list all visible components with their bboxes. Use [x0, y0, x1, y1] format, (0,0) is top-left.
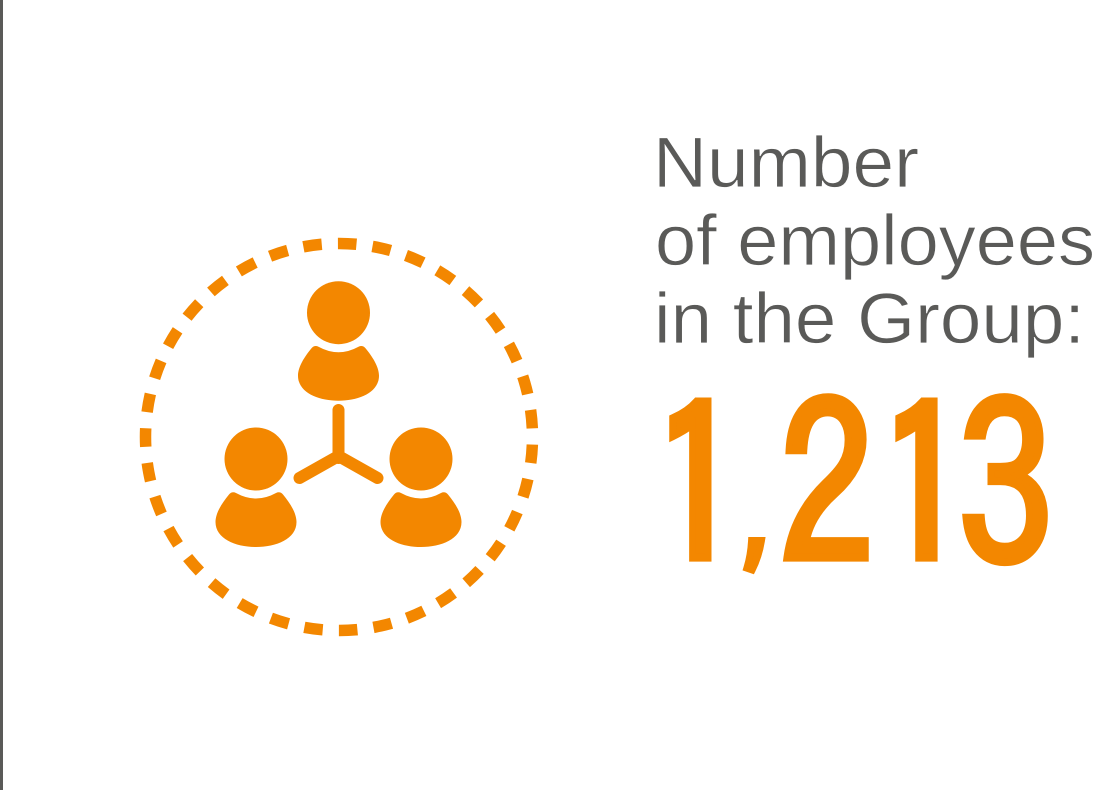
employee count value: , [742, 471, 785, 571]
icon: employees network in dashed circle [113, 211, 565, 663]
heading line 2: of employees [655, 202, 1095, 281]
employee count value: 213 [779, 373, 1053, 596]
dashed circle [113, 211, 565, 663]
heading line 3: in the Group: [654, 280, 1085, 359]
employee count value: 1 [650, 373, 745, 596]
icon: top person [298, 281, 379, 401]
icon: left person [216, 428, 296, 547]
icon: three-way connector [300, 410, 378, 478]
heading line 1: Number [653, 124, 919, 203]
left vertical divider [0, 0, 3, 790]
heading: number of employees in the group [653, 124, 1095, 359]
icon: right person [380, 428, 462, 547]
